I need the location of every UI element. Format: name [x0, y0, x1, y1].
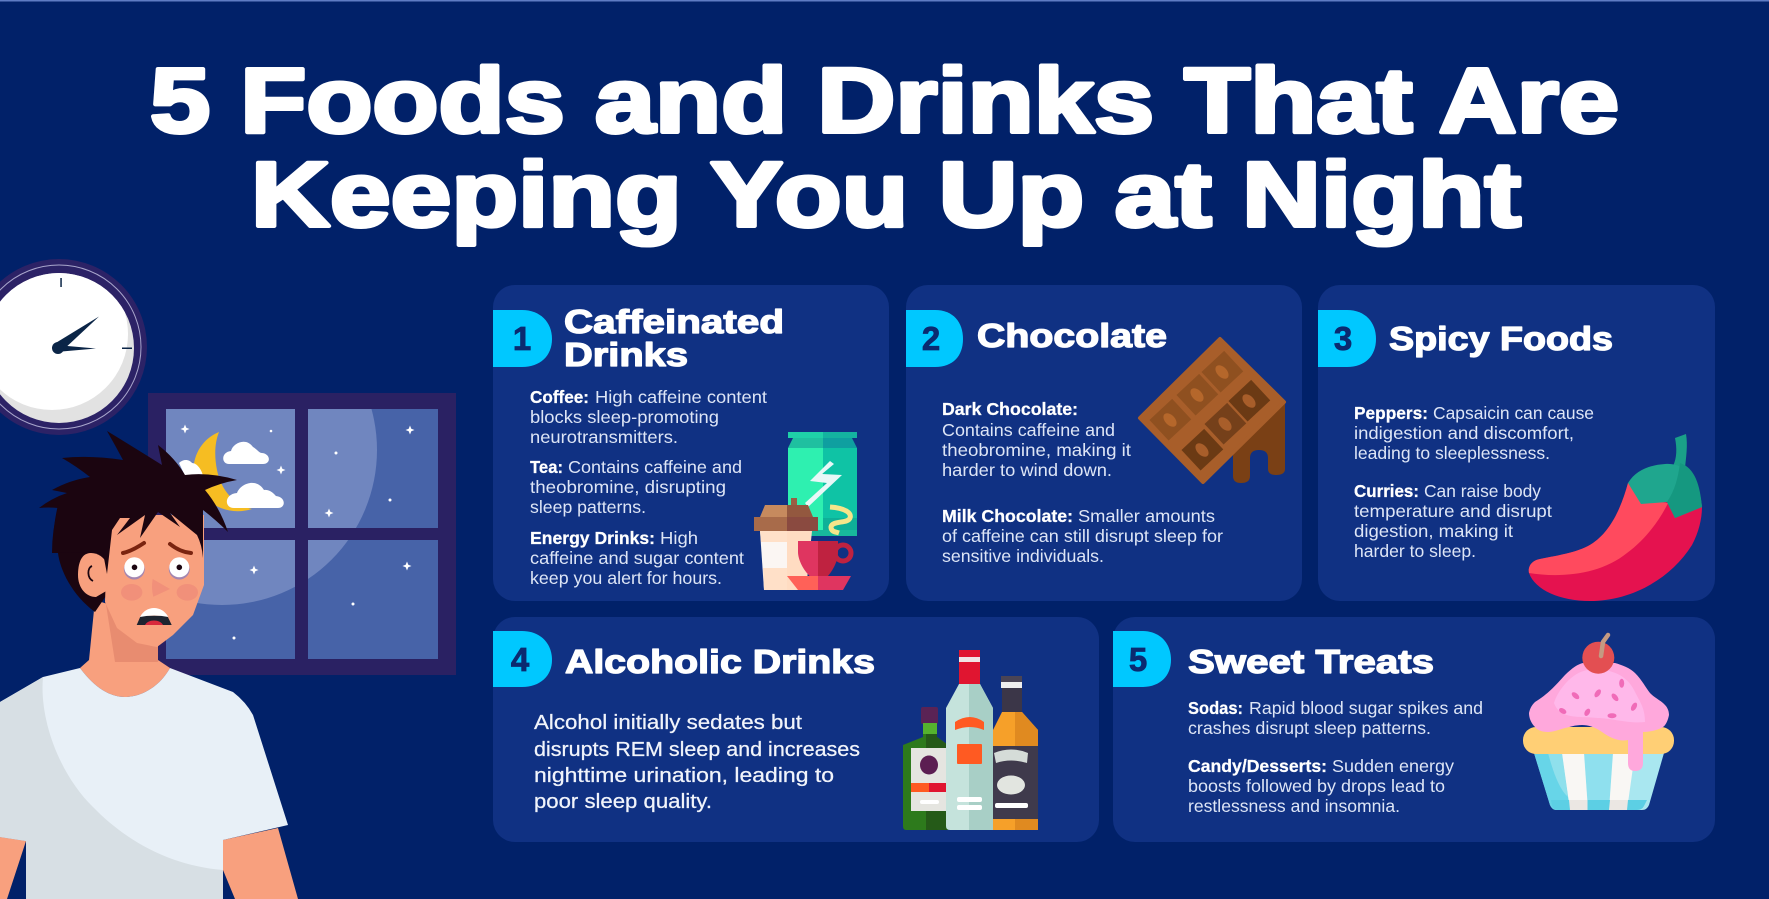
icon: chili pepper [1529, 434, 1702, 601]
text block: coffee, tea, energy drinks: theobromine, disrupting [530, 477, 726, 497]
title: 5 Foods and Drinks That Are [150, 50, 1619, 152]
text block: dark and milk chocolate: of caffeine can still disrupt sleep for [942, 526, 1223, 546]
heading: Chocolate [977, 317, 1167, 354]
heading [564, 303, 784, 373]
text block: sodas and candy: restlessness and insomnia. [1188, 796, 1400, 816]
text block: alcohol: poor sleep quality. [534, 791, 712, 813]
badge: number 4 [493, 631, 552, 687]
badge: number 2 [906, 310, 963, 367]
text block: dark and milk chocolate: theobromine, making it [942, 440, 1131, 460]
badge: number 1: 1 [513, 320, 531, 357]
text block: coffee, tea, energy drinks: neurotransmitters. [530, 427, 678, 447]
heading: Caffeinated [564, 303, 784, 340]
hair [39, 431, 237, 574]
panel: spicy foods [1318, 285, 1715, 601]
text block: dark and milk chocolate: sensitive individuals. [942, 546, 1104, 566]
text block: peppers and curries: leading to sleeplessness. [1354, 443, 1550, 463]
badge: number 5: 5 [1129, 641, 1147, 678]
cheeks and nose [121, 579, 198, 601]
text block: sodas and candy [1188, 698, 1483, 816]
character: tired man [0, 431, 298, 899]
text block: peppers and curries [1354, 403, 1594, 561]
text block: sodas and candy: boosts followed by drops lead to [1188, 776, 1445, 796]
face [105, 515, 204, 647]
text block: sodas and candy: crashes disrupt sleep patterns. [1188, 718, 1431, 738]
icon: clouds [179, 442, 284, 508]
text block: peppers and curries: digestion, making it [1354, 521, 1513, 541]
text block: alcohol: disrupts REM sleep and increases [534, 739, 860, 761]
text block: alcohol: Alcohol initially sedates but [534, 712, 802, 734]
icon: wall clock [0, 258, 147, 435]
icon: melting chocolate bar [1140, 339, 1285, 483]
text block: coffee, tea, energy drinks [530, 387, 767, 588]
text block: peppers and curries: indigestion and discomfort, [1354, 423, 1574, 443]
text block: alcohol [534, 712, 860, 813]
title: Keeping You Up at Night [251, 144, 1521, 246]
badge: number 3 [1318, 310, 1376, 367]
heading: Alcoholic Drinks [565, 643, 875, 680]
heading: Spicy Foods [1389, 320, 1613, 357]
eyes and brows [123, 543, 191, 580]
arms [0, 828, 298, 899]
text block: alcohol: nighttime urination, leading to [534, 765, 834, 787]
text block: dark and milk chocolate [942, 399, 1223, 566]
text block: sodas and candy: Candy/Desserts: [1188, 756, 1327, 776]
badge: number 1 [493, 310, 552, 367]
stars [180, 424, 414, 640]
ear [78, 553, 108, 597]
text block: coffee, tea, energy drinks: Coffee: [530, 387, 589, 407]
text block: coffee, tea, energy drinks: caffeine and sugar content [530, 548, 744, 568]
text block: dark and milk chocolate: harder to wind down. [942, 460, 1112, 480]
text block: sodas and candy: Rapid blood sugar spikes and [1249, 698, 1483, 718]
panel: sweet treats [1113, 617, 1715, 842]
text block: dark and milk chocolate: Contains caffeine and [942, 420, 1115, 440]
text block: coffee, tea, energy drinks: High [660, 528, 698, 548]
text block: peppers and curries: Curries: [1354, 481, 1419, 501]
icon: energy can, coffee and mug [754, 432, 857, 590]
icon: crescent moon [194, 432, 252, 511]
text block: dark and milk chocolate: Smaller amounts [1078, 506, 1215, 526]
text block: sodas and candy: Sodas: [1188, 698, 1243, 718]
icon: cupcake [1523, 635, 1674, 810]
badge: number 3: 3 [1334, 320, 1352, 357]
panel: chocolate [906, 285, 1302, 601]
text block: peppers and curries: harder to sleep. [1354, 541, 1476, 561]
badge: number 5 [1113, 631, 1171, 687]
text block: dark and milk chocolate: Dark Chocolate: [942, 399, 1078, 419]
text block: sodas and candy: Sudden energy [1332, 756, 1454, 776]
badge: number 4: 4 [511, 641, 530, 678]
t-shirt [0, 668, 288, 899]
text block: coffee, tea, energy drinks: Contains caffeine and [568, 457, 742, 477]
text block: peppers and curries: Capsaicin can cause [1433, 403, 1594, 423]
icon: three bottles [903, 650, 1038, 830]
heading: Sweet Treats [1188, 643, 1434, 680]
badge: number 2: 2 [922, 320, 940, 357]
heading: Drinks [564, 336, 688, 373]
text block: peppers and curries: temperature and disrupt [1354, 501, 1552, 521]
text block: coffee, tea, energy drinks: Tea: [530, 457, 563, 477]
text block: peppers and curries: Can raise body [1424, 481, 1541, 501]
title [150, 50, 1619, 246]
text block: dark and milk chocolate: Milk Chocolate: [942, 506, 1073, 526]
neck [80, 600, 170, 697]
text block: peppers and curries: Peppers: [1354, 403, 1428, 423]
window with night sky [148, 393, 456, 675]
text block: coffee, tea, energy drinks: sleep patterns. [530, 497, 646, 517]
back of hair [54, 480, 125, 612]
panel: alcoholic drinks [493, 617, 1099, 842]
mouth [137, 608, 172, 625]
panel: caffeinated drinks [493, 285, 889, 601]
text block: coffee, tea, energy drinks: High caffeine content [595, 387, 767, 407]
text block: coffee, tea, energy drinks: blocks sleep-promoting [530, 407, 719, 427]
text block: coffee, tea, energy drinks: keep you alert for hours. [530, 568, 722, 588]
text block: coffee, tea, energy drinks: Energy Drinks: [530, 528, 655, 548]
